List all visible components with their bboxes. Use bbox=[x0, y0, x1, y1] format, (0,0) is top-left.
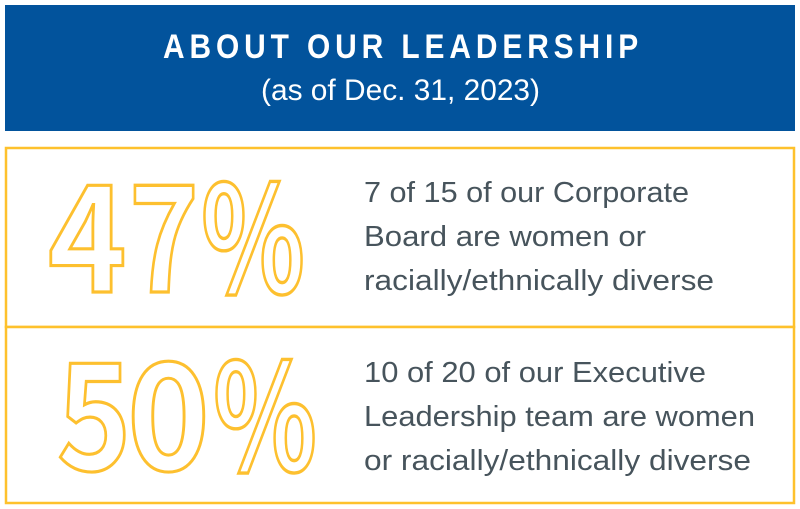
statistic: 50%: % bbox=[213, 301, 317, 509]
panel: corporate board bbox=[6, 121, 794, 336]
description: corporate board bbox=[364, 177, 714, 297]
description: executive leadership: Leadership team are women bbox=[364, 401, 755, 433]
description: executive leadership bbox=[364, 357, 755, 477]
statistic: 47%: 4 bbox=[48, 121, 127, 335]
statistic: 50%: 5 bbox=[57, 299, 131, 509]
panel: executive leadership bbox=[6, 299, 794, 509]
statistic: 47%: % bbox=[201, 123, 305, 336]
description: executive leadership: 10 of 20 of our Executive bbox=[364, 357, 706, 389]
header banner bbox=[5, 5, 795, 131]
description: corporate board: Board are women or bbox=[364, 221, 646, 253]
title: ABOUT OUR LEADERSHIP bbox=[163, 27, 638, 65]
statistic: 50%: 0 bbox=[127, 299, 210, 509]
statistic: 47% bbox=[48, 121, 305, 336]
description: executive leadership: or racially/ethnically diverse bbox=[364, 445, 751, 477]
statistic: 47%: 7 bbox=[129, 121, 199, 335]
statistic: 50% bbox=[57, 299, 317, 509]
description: corporate board: 7 of 15 of our Corporate bbox=[364, 177, 689, 209]
description: corporate board: racially/ethnically diverse bbox=[364, 265, 714, 297]
subtitle: (as of Dec. 31, 2023) bbox=[261, 74, 540, 107]
